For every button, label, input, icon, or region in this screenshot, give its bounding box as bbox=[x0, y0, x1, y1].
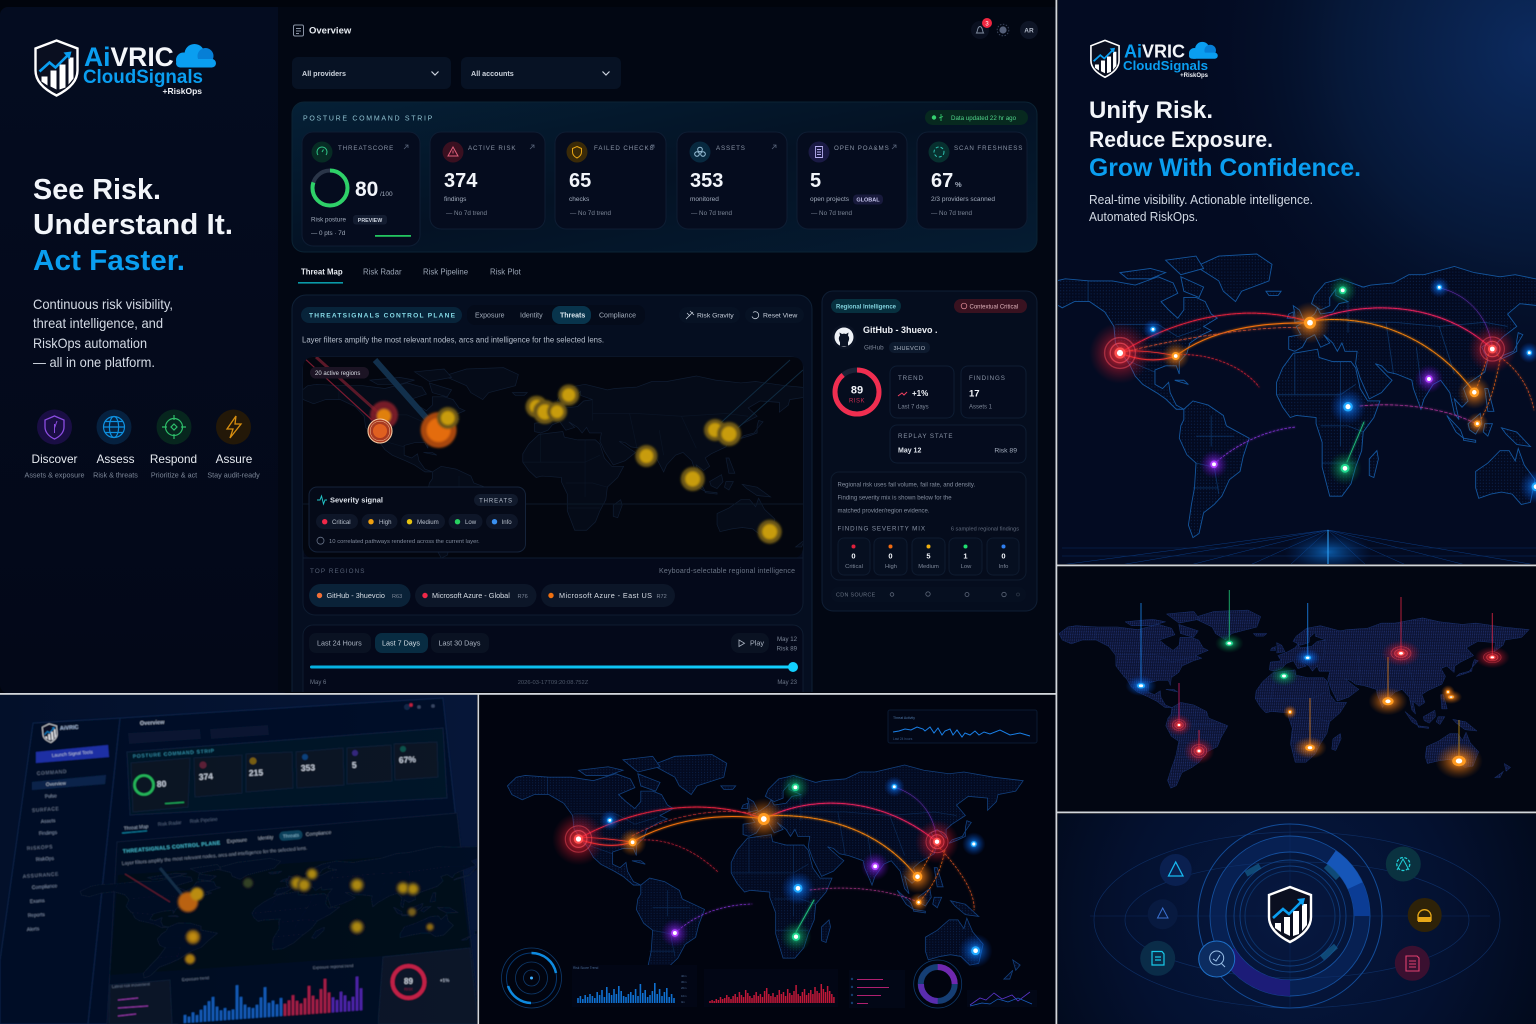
layer filters: Threats bbox=[560, 312, 585, 320]
description text: threat intelligence, and bbox=[33, 315, 163, 331]
tilted sidebar: RISKOPS bbox=[27, 844, 53, 852]
layer filters: Compliance bbox=[599, 312, 636, 320]
card: active risk: ACTIVE RISK bbox=[468, 145, 516, 152]
card: replay state: Risk 89 bbox=[994, 448, 1017, 454]
card: replay state bbox=[890, 425, 1026, 463]
card: scan freshness: — No 7d trend bbox=[931, 210, 972, 217]
tilted tabs: Reset View bbox=[428, 819, 453, 827]
card: replay state: May 12 bbox=[898, 448, 921, 454]
description text: RiskOps automation bbox=[33, 335, 147, 351]
severity mix box: 6 sampled regional findings bbox=[951, 526, 1019, 532]
card: open poa&ms: open projects bbox=[810, 196, 850, 203]
card: assets: ASSETS bbox=[716, 145, 746, 152]
tilted header: Overview bbox=[140, 720, 165, 727]
risk ring bbox=[835, 370, 879, 414]
icon: github bbox=[834, 328, 854, 346]
avatar: AR bbox=[1024, 28, 1034, 34]
tilted sidebar: Compliance bbox=[32, 883, 58, 891]
card: findings: FINDINGS bbox=[969, 375, 1006, 382]
panel: regional intelligence: GitHub - 3huevo . bbox=[863, 325, 938, 335]
card: active risk: 374 bbox=[444, 170, 478, 192]
avatar bbox=[1020, 21, 1038, 39]
play button bbox=[731, 633, 769, 653]
severity mix box: Regional risk uses fail volume, fail rate, and density. bbox=[838, 482, 975, 488]
card: active risk bbox=[430, 132, 545, 229]
icon: assess bbox=[96, 410, 132, 444]
card: threatscore: 80 bbox=[355, 178, 378, 201]
card: scan freshness: 2/3 providers scanned bbox=[931, 196, 995, 203]
severity mix box: High bbox=[885, 564, 897, 570]
region chip: github bbox=[309, 584, 410, 607]
logo: small bbox=[1091, 40, 1218, 79]
dropdown: providers: All providers bbox=[302, 69, 346, 78]
card: scan freshness: % bbox=[955, 180, 962, 189]
logo: AiVRIC CloudSignals: CloudSignals bbox=[83, 67, 203, 88]
card: failed checks: FAILED CHECKS bbox=[594, 145, 655, 152]
panel: regional intelligence bbox=[822, 291, 1037, 611]
icon node: lock bbox=[1408, 898, 1442, 932]
icon node: inspector bbox=[1199, 941, 1235, 977]
card: failed checks: 65 bbox=[569, 170, 591, 192]
widget: radar bbox=[502, 948, 562, 1008]
timeline replay: Last 7 Days bbox=[382, 638, 420, 648]
tilted risk card: +1% bbox=[440, 978, 449, 983]
logo: small: AiVRIC bbox=[1124, 42, 1185, 62]
description text: — all in one platform. bbox=[33, 354, 155, 370]
tilted sidebar: Launch Signal Tools bbox=[52, 749, 94, 758]
tilted sidebar: Overview bbox=[46, 781, 67, 788]
widget: red bar chart bbox=[704, 969, 838, 1007]
region chip: azure east us: R72 bbox=[656, 594, 667, 600]
card: assets bbox=[677, 132, 787, 229]
widget: ranked list bbox=[849, 970, 905, 1008]
tilted sidebar: SURFACE bbox=[32, 806, 60, 814]
tilted tabs: Threat Map bbox=[124, 824, 149, 832]
layer filters bbox=[476, 306, 636, 324]
button: reset view bbox=[752, 311, 798, 320]
tabs: Risk Pipeline bbox=[423, 268, 468, 276]
data updated badge: Data updated 22 hr ago bbox=[951, 115, 1017, 122]
headline: Unify Risk. bbox=[1089, 97, 1213, 124]
tilted header bbox=[128, 703, 435, 744]
region chip: github: R63 bbox=[392, 594, 402, 600]
card: findings: Assets 1 bbox=[969, 404, 993, 410]
headline: Reduce Exposure. bbox=[1089, 127, 1273, 152]
pillar labels: Assess bbox=[96, 452, 135, 466]
timeline replay: 2026-03-17T09:20:08.752Z bbox=[518, 680, 589, 686]
tilted tabs: Contact Notes bbox=[382, 822, 413, 831]
tilted posture strip: 353 bbox=[301, 762, 316, 773]
card: trend: TREND bbox=[898, 375, 924, 382]
dropdown: providers bbox=[292, 57, 451, 89]
card: assets: — No 7d trend bbox=[691, 210, 732, 217]
timeline replay: May 23 bbox=[777, 680, 798, 686]
severity mix box: Medium bbox=[918, 564, 939, 570]
card: open poa&ms bbox=[797, 132, 907, 229]
region chip: azure global: R76 bbox=[518, 594, 528, 600]
tilted charts: Latest risk movement bbox=[112, 981, 151, 989]
widget: signal line chart bbox=[888, 710, 1037, 743]
card: assets: monitored bbox=[690, 196, 719, 203]
pillar labels bbox=[32, 452, 253, 466]
tilted sidebar: COMMAND bbox=[37, 769, 67, 777]
tilted sidebar bbox=[23, 723, 109, 933]
logo: small: CloudSignals bbox=[1123, 58, 1208, 73]
tilted posture strip: 374 bbox=[198, 771, 214, 782]
severity mix box: 5 bbox=[926, 552, 931, 560]
panel: posture command strip: POSTURE COMMAND STRIP bbox=[303, 116, 434, 122]
active regions badge bbox=[310, 367, 369, 378]
card: scan freshness: 67 bbox=[931, 170, 953, 192]
widget: blue bar chart: 30m bbox=[681, 980, 687, 984]
severity mix box: 0 bbox=[851, 552, 856, 560]
pillar captions: Assets & exposure bbox=[25, 470, 84, 480]
panel: regional intelligence: Regional Intelligence bbox=[836, 304, 897, 310]
icon: assure bbox=[216, 410, 251, 444]
panel: right hero with headline bbox=[1047, 0, 1536, 572]
card: threatscore: THREATSCORE bbox=[338, 145, 394, 152]
tilted sidebar: Findings bbox=[39, 830, 58, 837]
description: Layer filters amplify the most relevant nodes, arcs and intelligence for the selected lens. bbox=[302, 336, 604, 344]
card: trend bbox=[890, 366, 954, 418]
tilted control plane: Exposure bbox=[227, 837, 248, 845]
panel: shield hub diagram bbox=[1058, 814, 1536, 1024]
threat map bbox=[299, 357, 815, 615]
severity mix box: 0 bbox=[888, 552, 893, 560]
panel: regional intelligence: GitHub bbox=[864, 344, 884, 352]
tilted posture strip: 80 bbox=[157, 779, 167, 789]
panel: main dashboard bbox=[278, 7, 1056, 715]
tilted tabs: Risk Radar bbox=[158, 820, 182, 828]
card: scan freshness: SCAN FRESHNESS bbox=[954, 145, 1023, 152]
icon: overview bbox=[294, 25, 304, 36]
tilted charts: Exposure regional trend bbox=[313, 964, 353, 970]
tabs bbox=[298, 268, 522, 284]
severity signal legend: High bbox=[379, 519, 392, 526]
severity mix box: 1 bbox=[963, 552, 968, 560]
severity signal legend: Critical bbox=[332, 519, 351, 526]
icon node: alert bbox=[1160, 854, 1192, 886]
timeline replay: Last 30 Days bbox=[438, 638, 481, 648]
severity mix box bbox=[831, 472, 1026, 580]
tilted sidebar: Pulse bbox=[45, 793, 57, 800]
central radial rings bbox=[1198, 824, 1382, 1008]
panel: world threat map with widgets bbox=[480, 695, 1056, 1024]
tilted control plane: Layer filters amplify the most relevant nodes, arcs and intelligence for the selected lens. bbox=[122, 845, 307, 867]
card: scan freshness bbox=[917, 132, 1027, 229]
control plane heading bbox=[301, 307, 462, 323]
tilted tabs: Risk Pipeline bbox=[190, 817, 218, 825]
icon: bell: 3 bbox=[985, 21, 989, 27]
tilted posture strip: POSTURE COMMAND STRIP bbox=[133, 748, 215, 760]
central shield bbox=[1269, 887, 1311, 942]
tilted sidebar: Alerts bbox=[27, 926, 40, 933]
button: risk gravity: Risk Gravity bbox=[697, 312, 734, 320]
card: open poa&ms: — No 7d trend bbox=[811, 210, 852, 217]
pillar labels: Respond bbox=[150, 452, 197, 466]
tilted sidebar: AiVRIC bbox=[60, 725, 79, 732]
card: threatscore: — 0 pts · 7d bbox=[311, 230, 346, 237]
severity signal legend: Severity signal bbox=[330, 496, 383, 504]
active regions badge: 20 active regions bbox=[315, 371, 360, 377]
severity signal legend: 10 correlated pathways rendered across the current layer. bbox=[329, 539, 480, 545]
panel: regional intelligence: 3HUEVCIO bbox=[893, 346, 926, 352]
tabs: Risk Radar bbox=[363, 268, 402, 276]
perspective floor bbox=[1060, 530, 1536, 572]
description text: Continuous risk visibility, bbox=[33, 296, 173, 312]
icon: theme bbox=[997, 24, 1009, 36]
widget: blue bar chart: 40m bbox=[681, 974, 687, 978]
card: failed checks bbox=[555, 132, 666, 229]
tilted control plane bbox=[18, 813, 545, 1024]
threat nodes bbox=[552, 773, 992, 968]
card: trend: +1% bbox=[912, 389, 928, 398]
topbar: Overview bbox=[309, 26, 352, 36]
headline: Act Faster. bbox=[33, 245, 185, 277]
tilted control plane: Threats bbox=[283, 833, 300, 840]
beacon beams bbox=[1141, 590, 1492, 761]
tilted posture strip: 5 bbox=[352, 760, 357, 770]
card: active risk: findings bbox=[444, 196, 467, 203]
region chip: github: GitHub - 3huevcio bbox=[326, 591, 385, 600]
severity signal legend bbox=[309, 487, 526, 552]
card: trend: Last 7 days bbox=[898, 404, 929, 410]
headline bbox=[1089, 97, 1361, 182]
pillar labels: Assure bbox=[216, 452, 253, 466]
severity mix box: Low bbox=[961, 564, 972, 570]
region chip: azure east us bbox=[541, 584, 675, 607]
data updated badge bbox=[925, 110, 1028, 125]
description text bbox=[33, 296, 173, 370]
tilted sidebar: RiskOps bbox=[36, 856, 55, 863]
widget: blue bar chart: 20m bbox=[681, 986, 687, 990]
icon node: network bbox=[1148, 899, 1178, 929]
timeline replay: May 6 bbox=[310, 680, 327, 686]
tilted posture strip: 67% bbox=[399, 754, 417, 765]
tabs: Threat Map bbox=[301, 268, 343, 276]
icon: respond bbox=[156, 410, 192, 444]
severity signal legend: THREATS bbox=[479, 498, 513, 504]
severity signal legend: Low bbox=[465, 519, 477, 526]
card: open poa&ms: GLOBAL bbox=[856, 198, 880, 204]
panel: left brand sidebar bbox=[0, 7, 290, 693]
severity mix box: 0 bbox=[1001, 552, 1006, 560]
widget: area chart bbox=[967, 990, 1037, 1007]
top regions bbox=[303, 558, 803, 607]
timeline replay: Last 24 Hours bbox=[317, 638, 362, 648]
severity mix box: matched provider/region evidence. bbox=[838, 508, 930, 514]
severity mix box: Finding severity mix is shown below for the bbox=[838, 496, 952, 502]
headline: Understand It. bbox=[33, 209, 233, 241]
beacon nodes bbox=[1125, 634, 1510, 779]
widget: donut bbox=[914, 960, 962, 1008]
tilted tabs bbox=[122, 817, 453, 834]
tilted control plane: Identity bbox=[258, 835, 274, 842]
top regions: TOP REGIONS bbox=[310, 568, 366, 575]
timeline replay bbox=[302, 624, 804, 692]
dropdown: accounts: All accounts bbox=[471, 69, 514, 78]
icon node: cloud nodes bbox=[1386, 846, 1421, 882]
tilted risk card bbox=[378, 948, 478, 1024]
tilted sidebar: Reports bbox=[28, 912, 45, 919]
orbit rings bbox=[1090, 824, 1500, 1008]
logo: AiVRIC CloudSignals bbox=[36, 40, 216, 96]
icon: bell bbox=[971, 18, 992, 39]
severity mix box: Info bbox=[999, 564, 1008, 570]
icon node: report bbox=[1395, 946, 1430, 981]
headline: Grow With Confidence. bbox=[1089, 155, 1361, 182]
pillar captions: Prioritize & act bbox=[151, 470, 197, 480]
tilted dashboard frame bbox=[0, 698, 545, 1024]
top regions: Keyboard-selectable regional intelligence bbox=[659, 568, 795, 575]
card: findings: 17 bbox=[969, 388, 980, 400]
severity mix box: Critical bbox=[845, 564, 863, 570]
pillar captions bbox=[25, 470, 260, 480]
tilted risk card: RISK bbox=[404, 988, 413, 992]
panel: 3D dotted world map with beacons bbox=[1041, 567, 1536, 811]
risk ring: RISK bbox=[849, 398, 865, 404]
card: open poa&ms: 5 bbox=[810, 170, 821, 192]
description: Automated RiskOps. bbox=[1089, 210, 1198, 224]
severity signal legend: Info bbox=[502, 519, 512, 526]
widget: blue bar chart: Risk Score Trend bbox=[573, 966, 598, 970]
severity mix box: FINDING SEVERITY MIX bbox=[838, 526, 926, 532]
card: open poa&ms: OPEN POA&MS bbox=[834, 145, 890, 152]
tilted sidebar: Exams bbox=[30, 898, 45, 905]
pillar labels: Discover bbox=[32, 452, 78, 466]
pillar captions: Risk & threats bbox=[93, 470, 138, 480]
panel: regional intelligence: Contextual Critical bbox=[970, 304, 1018, 310]
map outline bbox=[507, 755, 1023, 993]
panel: threatsignals control plane bbox=[292, 295, 815, 715]
logo: small: +RiskOps bbox=[1180, 73, 1209, 79]
risk ring: 89 bbox=[851, 384, 863, 396]
control plane heading: THREATSIGNALS CONTROL PLANE bbox=[309, 312, 456, 320]
headline bbox=[33, 174, 233, 277]
region chip: azure global bbox=[415, 584, 536, 607]
description: Real-time visibility. Actionable intelligence. bbox=[1089, 193, 1313, 207]
tilted sidebar: ASSURANCE bbox=[23, 871, 59, 880]
source row: CDN SOURCE bbox=[836, 592, 876, 598]
card: threatscore: PREVIEW bbox=[358, 218, 382, 224]
widget: blue bar chart: 10m bbox=[681, 994, 687, 998]
card: assets: 353 bbox=[690, 170, 723, 192]
headline: See Risk. bbox=[33, 174, 161, 206]
timeline replay: May 12 bbox=[777, 636, 798, 643]
layer filters: Exposure bbox=[475, 312, 505, 320]
panel: tilted dashboard perspective view bbox=[0, 695, 545, 1024]
severity signal legend: Medium bbox=[417, 519, 439, 526]
card: failed checks: — No 7d trend bbox=[570, 210, 611, 217]
tilted risk card: 89 bbox=[404, 977, 413, 986]
button: risk gravity bbox=[686, 310, 734, 320]
logo: AiVRIC CloudSignals: +RiskOps bbox=[163, 86, 202, 96]
tilted posture strip: 215 bbox=[249, 767, 264, 778]
tilted control plane: THREATSIGNALS CONTROL PLANE bbox=[123, 840, 221, 855]
card: failed checks: checks bbox=[569, 196, 590, 203]
tilted sidebar: Assets bbox=[41, 818, 56, 825]
threat arcs bbox=[578, 787, 974, 933]
card: active risk: — No 7d trend bbox=[446, 210, 487, 217]
widget: signal line chart: Last 24 hours bbox=[893, 737, 913, 741]
button: reset view: Reset View bbox=[763, 312, 797, 320]
logo: AiVRIC CloudSignals: AiVRIC bbox=[84, 42, 174, 72]
tilted posture strip bbox=[127, 728, 447, 815]
card: replay state: REPLAY STATE bbox=[898, 433, 953, 440]
timeline slider bbox=[310, 662, 798, 672]
pillar captions: Stay audit-ready bbox=[207, 470, 260, 480]
card: threatscore: Risk posture bbox=[311, 216, 346, 224]
layer filters: Identity bbox=[520, 312, 543, 320]
region chip: azure global: Microsoft Azure - Global bbox=[432, 591, 510, 600]
icon node: document bbox=[1140, 941, 1175, 976]
world map with arcs bbox=[1047, 254, 1536, 572]
tilted control plane: Compliance bbox=[306, 830, 332, 838]
region chip: azure east us: Microsoft Azure - East US bbox=[559, 591, 652, 600]
play button: Play bbox=[750, 638, 764, 648]
tilted charts: Exposure trend bbox=[182, 975, 209, 982]
widget: blue bar chart bbox=[572, 965, 697, 1007]
icon: discover bbox=[37, 410, 72, 444]
description bbox=[1089, 193, 1313, 224]
widget: signal line chart: Threat Activity bbox=[893, 716, 915, 720]
card: threatscore: /100 bbox=[380, 191, 393, 198]
tabs: Risk Plot bbox=[490, 268, 522, 276]
dropdown: accounts bbox=[461, 57, 621, 89]
tilted charts bbox=[109, 964, 378, 1024]
timeline replay: Risk 89 bbox=[777, 646, 798, 652]
card: threatscore bbox=[302, 132, 420, 246]
card: findings bbox=[961, 366, 1026, 418]
panel: posture command strip bbox=[292, 102, 1037, 252]
topbar bbox=[294, 18, 1038, 39]
widget: blue bar chart: 0m bbox=[681, 1000, 686, 1004]
source row bbox=[831, 587, 1026, 602]
